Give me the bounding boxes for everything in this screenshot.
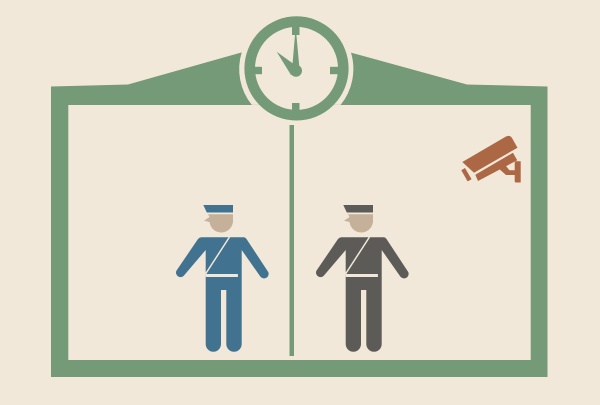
officer head [204,214,233,232]
building frame with roof [51,52,548,377]
figure: blue officer [176,205,269,352]
icon: security camera [461,136,521,182]
icon: clock [250,22,343,115]
officer cap [343,205,373,212]
officer cap [203,205,233,212]
officer sash [346,237,370,274]
officer head [344,214,373,232]
officer belt [346,274,378,277]
figure: grey officer [316,205,409,352]
officer sash [206,237,230,274]
centre divider [290,125,294,356]
officer body [316,237,409,352]
officer body [176,237,269,352]
officer belt [206,274,238,277]
